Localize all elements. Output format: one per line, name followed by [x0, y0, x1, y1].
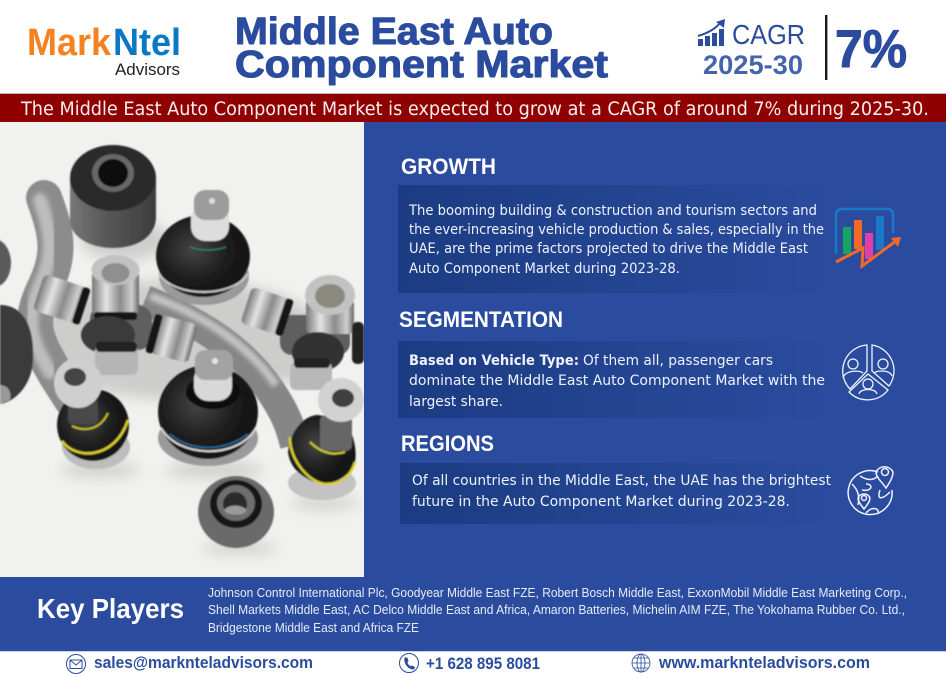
title	[235, 11, 608, 86]
ball joint upper	[156, 190, 250, 305]
small ball joint right	[288, 378, 364, 500]
segmentation text panel: largest share.	[409, 394, 503, 410]
title: Middle East Auto	[235, 11, 553, 53]
key players band	[0, 577, 946, 651]
universal joint right	[240, 275, 364, 390]
growth text panel: The booming building & construction and tourism sectors and	[408, 203, 817, 219]
section: regions	[400, 431, 893, 524]
regions heading: REGIONS	[401, 431, 494, 456]
key players list: Johnson Control International Plc, Goodyear Middle East FZE, Robert Bosch Middle East, ExxonMobil Middle East Marketing Corp.,	[208, 586, 907, 600]
logo	[27, 22, 181, 79]
key players list: Bridgestone Middle East and Africa FZE	[208, 621, 419, 635]
regions text panel: Of all countries in the Middle East, the UAE has the brightest	[412, 473, 831, 489]
segmentation text panel: Based on Vehicle Type:	[409, 353, 579, 369]
small ball joint left	[54, 358, 130, 469]
photo: auto components	[0, 122, 364, 577]
growth text panel: Auto Component Market during 2023-28.	[409, 261, 680, 277]
logo: Mark	[27, 22, 112, 64]
section: growth	[398, 154, 901, 293]
segmentation heading: SEGMENTATION	[399, 307, 563, 332]
growth text panel	[398, 185, 838, 293]
CAGR badge: 2025-30	[703, 50, 803, 80]
regions text panel	[400, 463, 838, 524]
footer contacts	[0, 651, 946, 674]
blue content background	[364, 122, 946, 577]
CAGR badge	[698, 19, 805, 80]
logo: Ntel	[113, 22, 181, 64]
segmentation text panel	[398, 341, 838, 418]
header	[27, 11, 907, 86]
logo: Advisors	[115, 60, 180, 79]
silver arm right	[145, 300, 295, 445]
email contact: sales@marknteladvisors.com	[94, 654, 313, 672]
icon: growth chart	[836, 209, 901, 266]
small bushing	[198, 476, 274, 548]
phone contact: +1 628 895 8081	[426, 655, 540, 673]
segmentation text panel: dominate the Middle East Auto Component Market with the	[409, 373, 825, 389]
section: segmentation	[398, 307, 894, 418]
key players list: Shell Markets Middle East, AC Delco Middle East and Africa, Amaron Batteries, Michelin AIM FZE, The Yokohama Rubber Co. Ltd.,	[208, 603, 905, 617]
key players list	[208, 586, 907, 635]
divider	[825, 15, 827, 80]
large bushing	[70, 145, 156, 248]
website contact: www.marknteladvisors.com	[658, 654, 870, 672]
key players heading: Key Players	[37, 593, 184, 624]
universal joint left	[33, 255, 198, 375]
silver tube left	[35, 198, 72, 400]
summary banner: The Middle East Auto Component Market is expected to grow at a CAGR of around 7% during 2025-30.	[20, 99, 929, 120]
icon: globe with pins	[848, 467, 893, 515]
growth text panel: the ever-increasing vehicle production & sales, especially in the	[409, 222, 824, 238]
ball joint centre	[158, 350, 258, 466]
CAGR badge: CAGR	[732, 19, 805, 50]
CAGR value: 7%	[835, 20, 907, 79]
icon: segmented people circle	[843, 345, 894, 400]
regions text panel: future in the Auto Component Market during 2023-28.	[412, 494, 790, 510]
segmentation text panel: Of them all, passenger cars	[583, 353, 773, 369]
left edge parts	[0, 239, 11, 287]
growth text panel: UAE, are the prime factors projected to drive the Middle East	[409, 241, 808, 257]
icon: growth bars	[698, 19, 725, 46]
title: Component Market	[235, 44, 608, 86]
growth heading: GROWTH	[401, 154, 496, 179]
soft shadows	[30, 220, 360, 554]
